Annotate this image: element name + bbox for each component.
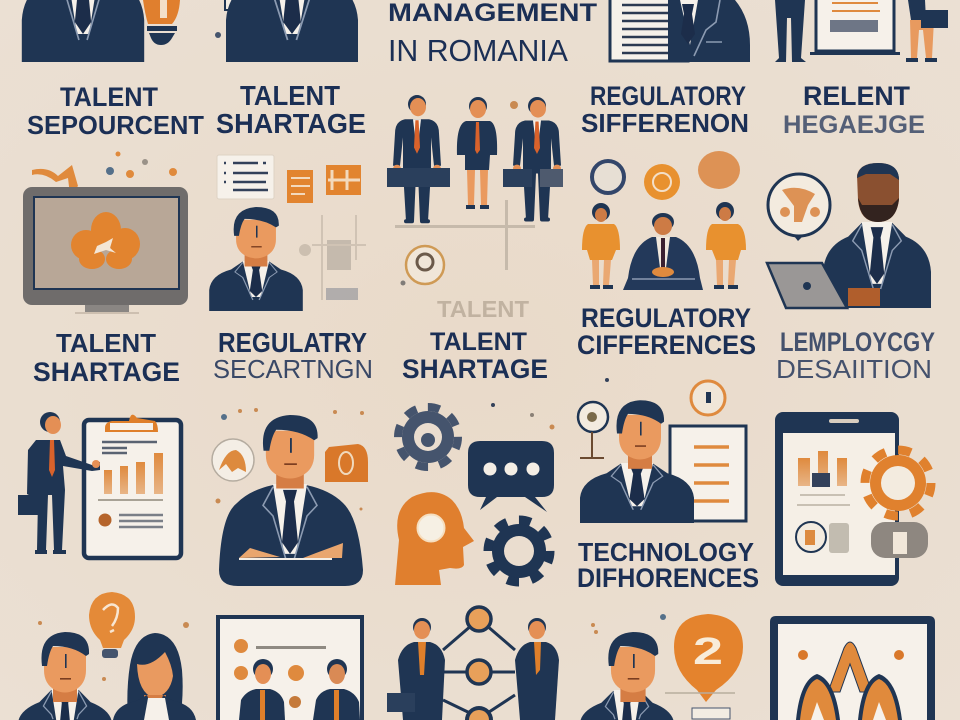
icon: sparkles [798,650,904,660]
icon: middle person [420,97,497,209]
panel: faded talent badge [395,200,535,322]
line 2: SECARTNGN [213,354,373,384]
faded marks [395,200,535,286]
icon: right presenter [906,0,948,62]
icon: small badge [796,522,849,553]
icon: round badge [212,439,254,481]
decorative specks [38,101,666,681]
icon: businessman [580,400,694,523]
icon: bar chart [797,451,850,505]
icon: nodes [465,607,493,720]
icon: left orange figure [582,203,620,289]
icon: orange pin [674,614,743,702]
icon: left person [239,659,285,720]
heading line 2: IN ROMANIA [388,33,568,68]
icon: right orange figure [706,202,746,289]
line 2: HEGAEJGE [783,111,925,139]
label: technology difhorences [577,537,759,593]
icon: board [810,0,900,55]
icon: faded diagram [299,215,366,300]
icon: network links [442,625,515,714]
label: talent sepourcent [27,82,204,140]
line 2: DESAIITION [776,354,932,384]
line 2: SEPOURCENT [27,110,204,140]
icon: document [610,0,688,61]
panel: tablet with gear [775,412,931,586]
icon: left person [387,95,441,223]
line 1: REGULATORY [581,303,751,333]
icon: left person [387,618,445,720]
icon: woman [113,633,196,720]
line 2: SHARTAGE [216,108,366,139]
icon: navy gear [488,520,550,582]
icon: list card [217,155,274,199]
label: talent shartage left [33,328,180,387]
faded label: TALENT [437,296,529,322]
icon: presenter [18,412,100,554]
panel: monitor [23,152,188,314]
line 1: RELENT [803,81,911,111]
line 1: TECHNOLOGY [578,537,754,567]
label: talent shartage [216,80,366,139]
icon: ring badge [406,246,444,284]
icon: clipboard [84,415,181,558]
icon: orange gear [865,450,931,516]
icon: businessman [219,415,363,586]
icon: gray chip [871,522,928,558]
line 1: REGULATORY [590,81,746,111]
icon: orange pin: 2 [693,631,723,673]
icon: orange ring [691,381,725,415]
line 2: SHARTAGE [402,354,548,384]
line 2: SIFFERENON [581,108,749,138]
icon: orange coin [644,164,680,200]
panel: technology differences figure [578,381,746,523]
icon: seated figure [623,213,703,290]
icon: man [19,632,111,720]
icon: businessman [209,207,303,311]
icon: monitor frame [23,187,188,314]
icon: tablet [775,412,899,586]
line 2: SHARTAGE [33,357,180,387]
label: talent shartage center [402,328,548,384]
label: regulatory sifferenon [581,81,749,138]
icon: gray gear [398,407,458,467]
title [388,0,597,68]
icon: right person [503,97,563,221]
icon: navy coin [592,161,624,193]
panel: businessman with question pin [581,614,743,720]
icon: light bulb [89,592,135,658]
icon: orange blocks [287,165,361,203]
icon: light bulb [143,0,180,45]
line 1: TALENT [56,328,156,358]
icon: faded chart [665,693,735,719]
icon: screen frame [216,615,364,720]
panel: businessman with cards [209,155,366,311]
panel: man and woman with bulb [19,592,196,720]
icon: lamp sign [578,402,608,458]
panel: top businessman 2 [215,0,358,62]
icon: businessman [581,632,673,720]
panel: three business people [387,95,563,223]
icon: speech bubble [468,441,554,512]
icon: document [670,426,746,521]
panel: presenter with clipboard [18,412,181,558]
label: lemployggy desaiition [776,327,935,384]
icon: small document [225,0,243,10]
line 1: TALENT [240,80,340,111]
panel: regulatory differences figures [582,151,746,290]
panel: document and businessman [610,0,750,62]
icon: orange chat card [325,444,368,482]
icon: right person [515,618,559,720]
icon: orange arches [796,642,902,720]
icon: right person [313,659,360,720]
panel: arms-crossed businessman [212,415,368,586]
panel: screen with people [216,615,364,720]
icon: businessman bust [22,0,144,62]
icon: bust [823,163,931,308]
panel: network with two people [387,607,559,720]
panel: head with gears and chat [395,407,554,585]
label: regulatry secartngn [213,327,373,384]
icon: orange head [395,492,474,585]
line 1: TALENT [60,82,158,112]
icon: laptop [767,263,880,308]
icon: orange flower [71,212,140,269]
panel: bearded businessman with laptop [767,163,931,308]
icon: speech bubble globe [768,174,830,241]
panel: presenters with board [775,0,948,62]
panel: framed orange arches [770,616,935,720]
label: relent hegaejge [783,81,925,139]
label: regulatory cifferences [577,303,756,360]
icon: left presenter legs [775,0,806,62]
panel: top left businessman with bulb [22,0,180,62]
icon: splashes [32,152,177,195]
icon: dot [215,32,221,38]
icon: frame [770,616,935,720]
line 2: DIFHORENCES [577,563,759,593]
line 1: REGULATRY [218,327,367,358]
icon: businessman bust [668,0,750,62]
line 1: TALENT [430,328,527,356]
icon: orange disc [698,151,740,189]
line 2: CIFFERENCES [577,330,756,360]
icon: businessman bust [226,0,358,62]
